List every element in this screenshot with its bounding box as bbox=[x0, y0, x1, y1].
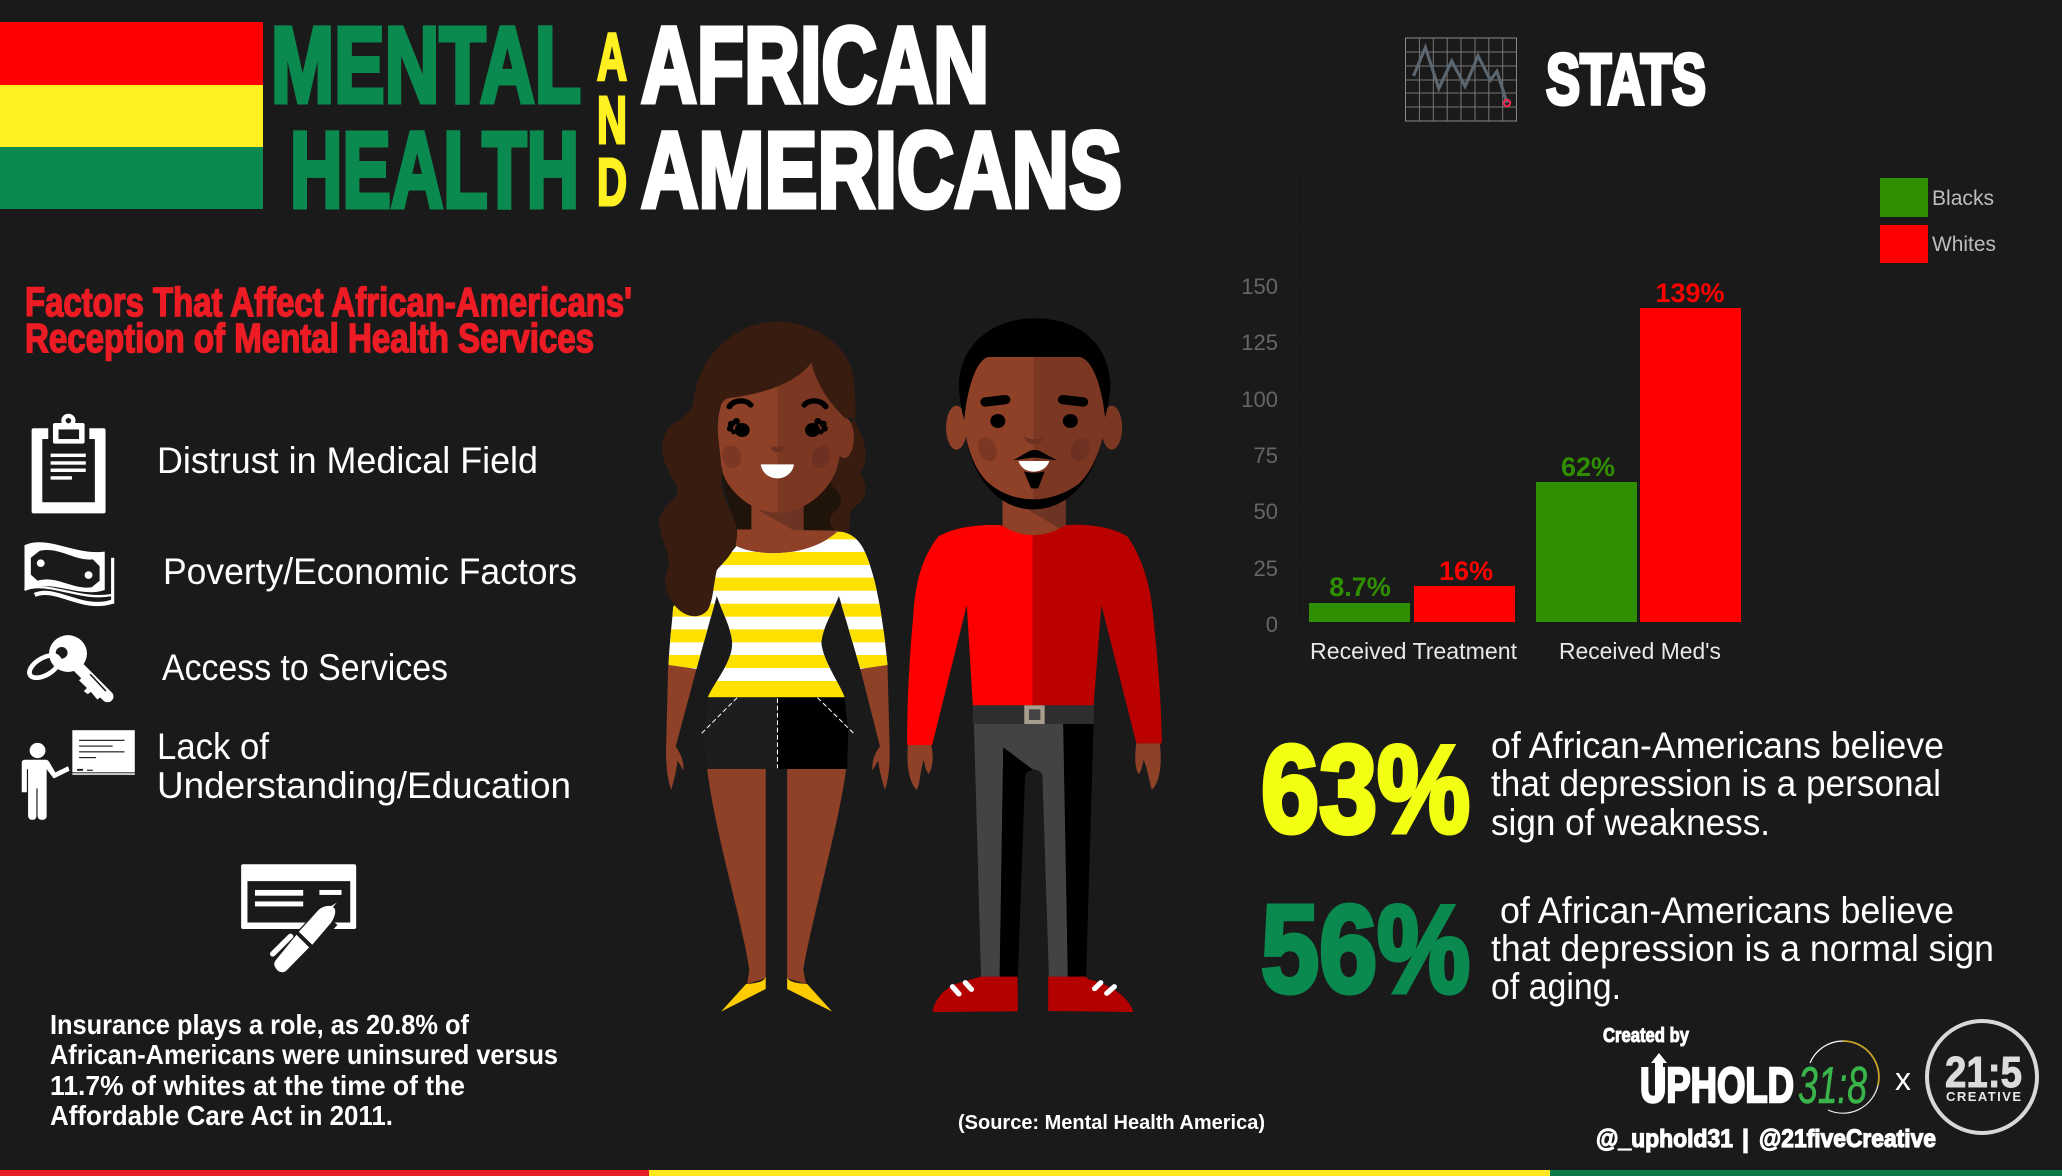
beard bbox=[967, 440, 1101, 509]
brows bbox=[729, 401, 751, 407]
bar value labels: 62% bbox=[1561, 452, 1615, 482]
bar chart bbox=[1241, 169, 1840, 664]
bars bbox=[1309, 603, 1410, 622]
logo: uphold 31:8: 31:8 bbox=[1798, 1057, 1867, 1115]
title bbox=[271, 4, 1122, 230]
title: vertical and: D bbox=[597, 145, 627, 220]
title: mental health: MENTAL bbox=[271, 4, 581, 125]
social handles bbox=[1596, 1125, 1936, 1153]
y axis labels: 25 bbox=[1254, 556, 1278, 581]
text: distrust: Distrust in Medical Field bbox=[157, 440, 538, 481]
bottom colour bar bbox=[0, 1170, 2062, 1176]
stat: 63 percent: 63% bbox=[1261, 721, 1470, 859]
heading: factors: Reception of Mental Health Services bbox=[25, 315, 594, 361]
skirt bbox=[704, 697, 777, 769]
shoes bbox=[932, 977, 1018, 1012]
arms bbox=[666, 665, 696, 790]
created by: Created by bbox=[1603, 1025, 1690, 1047]
eyes bbox=[727, 418, 828, 437]
icon: money bbox=[25, 542, 113, 604]
neck bbox=[751, 500, 804, 532]
category labels: Received Med's bbox=[1559, 638, 1721, 664]
bar value labels: 16% bbox=[1439, 556, 1493, 586]
text: insurance note: Insurance plays a role, as 20.8% of bbox=[50, 1009, 470, 1040]
title: vertical and: N bbox=[597, 83, 627, 158]
stat: 63 percent bbox=[1261, 721, 1944, 859]
stat text: normal aging: of African-Americans believe bbox=[1500, 890, 1954, 931]
hands bbox=[907, 745, 933, 790]
y axis labels bbox=[1241, 274, 1278, 637]
social handles: | bbox=[1742, 1125, 1749, 1153]
face bbox=[718, 380, 777, 513]
icon: line chart bbox=[1406, 38, 1516, 121]
title: african americans: AFRICAN bbox=[641, 4, 989, 125]
text: access: Access to Services bbox=[162, 647, 448, 688]
smile bbox=[761, 464, 794, 478]
text: lack of understanding: Lack of bbox=[157, 726, 270, 767]
factor list bbox=[22, 414, 577, 820]
stat text: personal weakness bbox=[1491, 725, 1944, 843]
text: lack of understanding: Understanding/Education bbox=[157, 765, 571, 806]
title: vertical and bbox=[597, 20, 627, 220]
credits bbox=[1596, 1021, 2037, 1153]
text: insurance note bbox=[50, 1009, 558, 1131]
logo: 21:5 creative: CREATIVE bbox=[1946, 1089, 2021, 1104]
icon: clipboard bbox=[32, 414, 106, 513]
social handles: @_uphold31 bbox=[1596, 1125, 1733, 1153]
social handles: @21fiveCreative bbox=[1759, 1125, 1936, 1153]
heading: factors: Factors That Affect African-Americans' bbox=[25, 279, 632, 325]
legs bbox=[707, 769, 766, 984]
stat text: personal weakness: that depression is a personal bbox=[1491, 763, 1941, 804]
y axis labels: 0 bbox=[1266, 612, 1278, 637]
chest bbox=[736, 529, 838, 555]
trousers bbox=[974, 724, 1068, 977]
stat text: personal weakness: sign of weakness. bbox=[1491, 802, 1770, 843]
logo: uphold 31:8: UPHOLD bbox=[1640, 1059, 1794, 1113]
logo: 21:5 creative: 21:5 bbox=[1945, 1048, 2022, 1097]
neck bbox=[1002, 495, 1066, 537]
mouth and goatee bbox=[1013, 450, 1057, 460]
face bbox=[964, 357, 1034, 499]
shoes bbox=[721, 977, 766, 1012]
title: vertical and: A bbox=[597, 20, 627, 95]
y axis labels: 100 bbox=[1241, 387, 1278, 412]
stat text: personal weakness: of African-Americans believe bbox=[1491, 725, 1944, 766]
logo: 21:5 creative bbox=[1927, 1021, 2037, 1133]
bar value labels: 139% bbox=[1655, 278, 1725, 308]
brows bbox=[985, 400, 1083, 402]
title: mental health: HEALTH bbox=[290, 109, 579, 230]
legend bbox=[1880, 178, 1996, 263]
y axis labels: 50 bbox=[1254, 499, 1278, 524]
text: insurance note: African-Americans were uninsured versus bbox=[50, 1039, 558, 1070]
bar value labels: 8.7% bbox=[1329, 572, 1391, 602]
icon: teacher at board bbox=[22, 730, 135, 820]
stat text: normal aging: of aging. bbox=[1491, 966, 1621, 1007]
y axis labels: 150 bbox=[1241, 274, 1278, 299]
stat text: normal aging: that depression is a normal sign bbox=[1491, 928, 1994, 969]
illustration: woman bbox=[659, 322, 897, 1012]
icon: cheque and pen bbox=[241, 864, 356, 972]
title: african americans bbox=[641, 4, 1122, 230]
text: poverty: Poverty/Economic Factors bbox=[163, 551, 577, 592]
title: mental health bbox=[271, 4, 581, 230]
cheeks and nose bbox=[975, 435, 1000, 464]
logo: uphold 31:8 bbox=[1640, 1041, 1879, 1115]
belt bbox=[973, 705, 1094, 724]
striped top bbox=[661, 527, 897, 698]
text: insurance note: Affordable Care Act in 2011. bbox=[50, 1100, 393, 1131]
y axis labels: 75 bbox=[1254, 443, 1278, 468]
stat text: normal aging bbox=[1491, 890, 1994, 1007]
cheeks and nose bbox=[720, 444, 743, 470]
ears bbox=[946, 406, 967, 450]
title: african americans: AMERICANS bbox=[641, 109, 1122, 230]
back hair bbox=[720, 467, 842, 531]
category labels bbox=[1310, 638, 1721, 664]
text: source: (Source: Mental Health America) bbox=[958, 1112, 1265, 1134]
heading: factors bbox=[25, 279, 632, 361]
legend: whites: Whites bbox=[1932, 233, 1996, 256]
ear bbox=[835, 417, 854, 458]
eyes bbox=[990, 414, 1005, 428]
heading: stats: STATS bbox=[1546, 41, 1706, 120]
front hair bbox=[659, 322, 856, 616]
stat: 56 percent bbox=[1261, 881, 1994, 1019]
hair bbox=[959, 318, 1110, 421]
y axis labels: 125 bbox=[1241, 330, 1278, 355]
icon: key bbox=[26, 635, 108, 700]
stat: 56 percent: 56% bbox=[1261, 881, 1470, 1019]
category labels: Received Treatment bbox=[1310, 638, 1518, 664]
illustration: man bbox=[907, 318, 1162, 1012]
legend: blacks: Blacks bbox=[1932, 187, 1994, 210]
text: insurance note: 11.7% of whites at the time of the bbox=[50, 1070, 465, 1101]
sweater bbox=[907, 525, 1033, 745]
text: lack of understanding bbox=[157, 726, 571, 806]
flag: red yellow green stripes bbox=[0, 22, 263, 209]
bar value labels bbox=[1329, 278, 1725, 602]
times sign: x bbox=[1895, 1061, 1911, 1097]
